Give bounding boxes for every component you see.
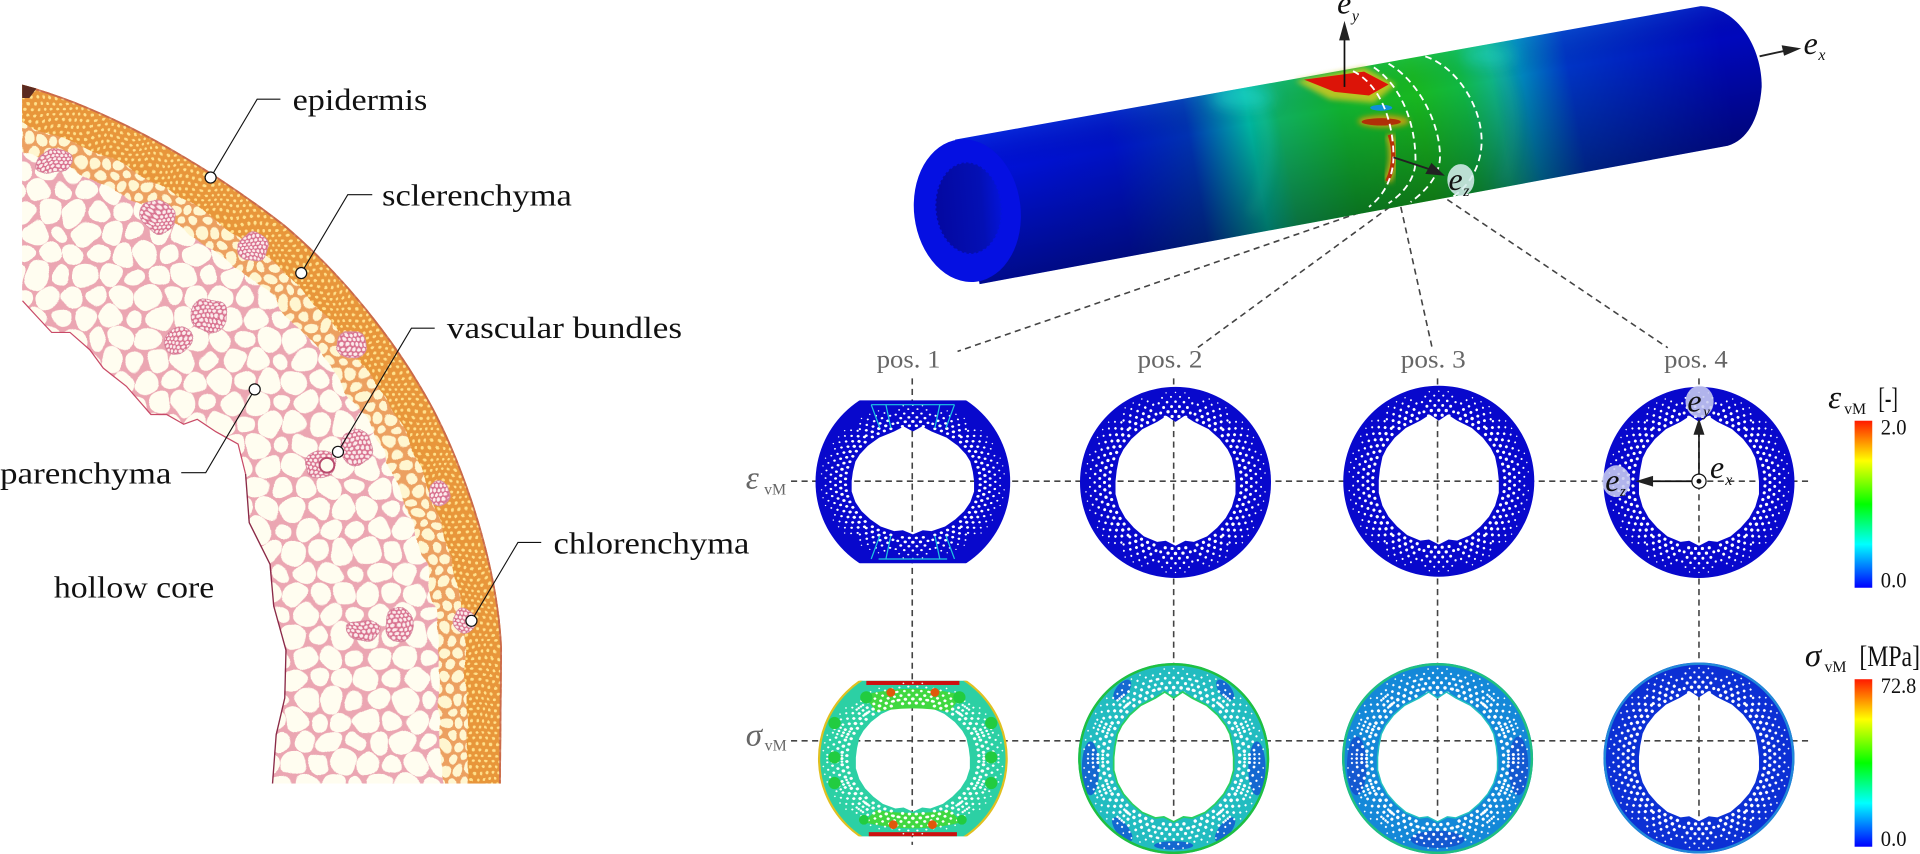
connector lines from cylinder to positions (958, 200, 1668, 351)
label: epidermis (205, 83, 427, 183)
local axes at pos. 4: e (1605, 463, 1619, 498)
section: stress pos. 3 (1342, 663, 1533, 854)
legend: stress colour bar (1805, 638, 1920, 851)
label: sclerenchyma (296, 179, 572, 279)
white dashed section rings (1353, 56, 1482, 207)
row label: stress: σ (746, 718, 764, 754)
label: parenchyma (0, 384, 260, 491)
axis e_z with bubble: z (1462, 183, 1469, 200)
position labels: pos. 4 (1664, 344, 1728, 373)
section: stress pos. 2 (1078, 663, 1269, 854)
legend: stress colour bar: 0.0 (1881, 826, 1907, 851)
row label: strain: ε (746, 461, 759, 497)
position labels: pos. 3 (1401, 344, 1466, 373)
label: parenchyma: parenchyma (0, 457, 172, 491)
position labels: pos. 1 (877, 344, 940, 373)
curved teal transition bands (1207, 44, 1517, 151)
section: strain pos. 1 (816, 400, 1010, 564)
panel: tissue micrograph (0, 49, 750, 808)
legend: strain colour bar: vM (1844, 401, 1866, 418)
legend: strain colour bar: [-] (1878, 383, 1898, 415)
section: strain pos. 2 (1080, 387, 1271, 578)
row label: strain (746, 461, 786, 499)
section: stress pos. 1 (818, 680, 1008, 836)
micrograph: bamboo cross-section (22, 84, 502, 784)
label: hollow core: hollow core (54, 571, 214, 605)
row label: strain: vM (764, 482, 786, 499)
position labels: pos. 2 (1138, 344, 1202, 373)
axis e_x: x (1817, 47, 1825, 64)
axis e_y (1337, 0, 1360, 87)
local axes at pos. 4: e (1687, 383, 1701, 418)
legend: stress colour bar: σ (1805, 638, 1823, 674)
section: strain pos. 4 (1603, 387, 1794, 578)
label: vascular bundles (332, 311, 682, 457)
legend: stress colour bar: 72.8 (1881, 673, 1916, 698)
position labels (877, 344, 1728, 373)
legend: strain colour bar: 0.0 (1881, 568, 1907, 593)
legend: strain colour bar: 2.0 (1881, 415, 1907, 440)
label: chlorenchyma: chlorenchyma (553, 526, 750, 560)
local axes at pos. 4: z (1619, 484, 1626, 500)
axis e_x (1760, 26, 1825, 64)
legend: strain colour bar: ε (1828, 380, 1841, 416)
local axes at pos. 4: x (1724, 472, 1732, 489)
row label: stress: vM (765, 738, 787, 755)
label: sclerenchyma: sclerenchyma (382, 179, 572, 213)
legend: stress colour bar: vM (1824, 659, 1847, 676)
axis e_z with bubble (1393, 157, 1474, 200)
axis e_x: e (1804, 26, 1818, 61)
label: epidermis: epidermis (293, 83, 427, 117)
3D cylinder FE model (906, 0, 1825, 288)
local axes at pos. 4: e (1710, 450, 1724, 485)
row label: stress (746, 718, 787, 755)
section grid dashed lines (791, 378, 1810, 845)
end cap of cylinder (906, 133, 1029, 288)
section: strain pos. 3 (1343, 386, 1534, 577)
axis e_y: y (1350, 8, 1360, 25)
section: stress pos. 4 (1603, 662, 1794, 853)
label: vascular bundles: vascular bundles (447, 311, 682, 345)
local axes at pos. 4 (1602, 383, 1732, 500)
label: chlorenchyma (466, 526, 750, 626)
damage hot spots (1296, 67, 1409, 181)
legend: strain colour bar (1828, 380, 1907, 593)
local axes at pos. 4: y (1701, 404, 1710, 420)
axis e_z with bubble: e (1449, 162, 1463, 197)
